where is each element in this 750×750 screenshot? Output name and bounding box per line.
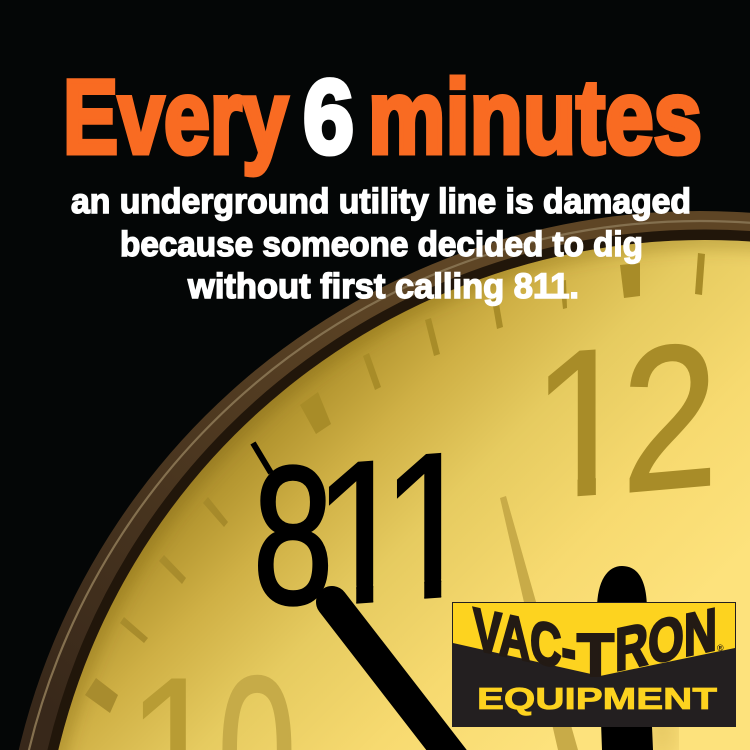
logo yellow band (453, 603, 735, 676)
numeral 811: 1 (381, 405, 479, 645)
logo wordmark: VAC- (473, 595, 576, 684)
logo equipment text: EQUIPMENT (477, 681, 717, 716)
numeral 12: 1 (530, 303, 636, 544)
logo wordmark (473, 595, 717, 689)
numeral 12: 2 (622, 300, 718, 536)
title: 6 (303, 59, 354, 176)
numeral 12 (548, 344, 710, 496)
subtitle text: without first calling 811. (187, 267, 579, 306)
clock (0, 211, 750, 750)
numeral 811: 8 (253, 426, 333, 645)
clock rim (0, 211, 750, 750)
logo: Vac-Tron Equipment (452, 595, 736, 727)
tail tick (253, 443, 271, 473)
subtitle text (71, 182, 691, 306)
minute ticks (85, 253, 705, 713)
subtitle text: because someone decided to dig (120, 225, 643, 264)
numeral 811 (258, 452, 442, 607)
subtitle text: an underground utility line is damaged (71, 182, 691, 221)
minute hand (332, 602, 462, 750)
hand shadow (652, 727, 679, 750)
numeral 811: 1 (313, 415, 411, 650)
logo wordmark: RON (615, 595, 717, 684)
title: Every (63, 59, 288, 176)
title (63, 59, 702, 176)
hour hand (597, 566, 653, 750)
face edge shading (40, 240, 750, 750)
clock face (40, 240, 750, 750)
numeral 10 (143, 674, 292, 750)
logo background (452, 602, 736, 727)
second hand (500, 496, 578, 750)
logo registered mark: ® (717, 643, 724, 653)
logo wordmark: T (577, 622, 614, 689)
